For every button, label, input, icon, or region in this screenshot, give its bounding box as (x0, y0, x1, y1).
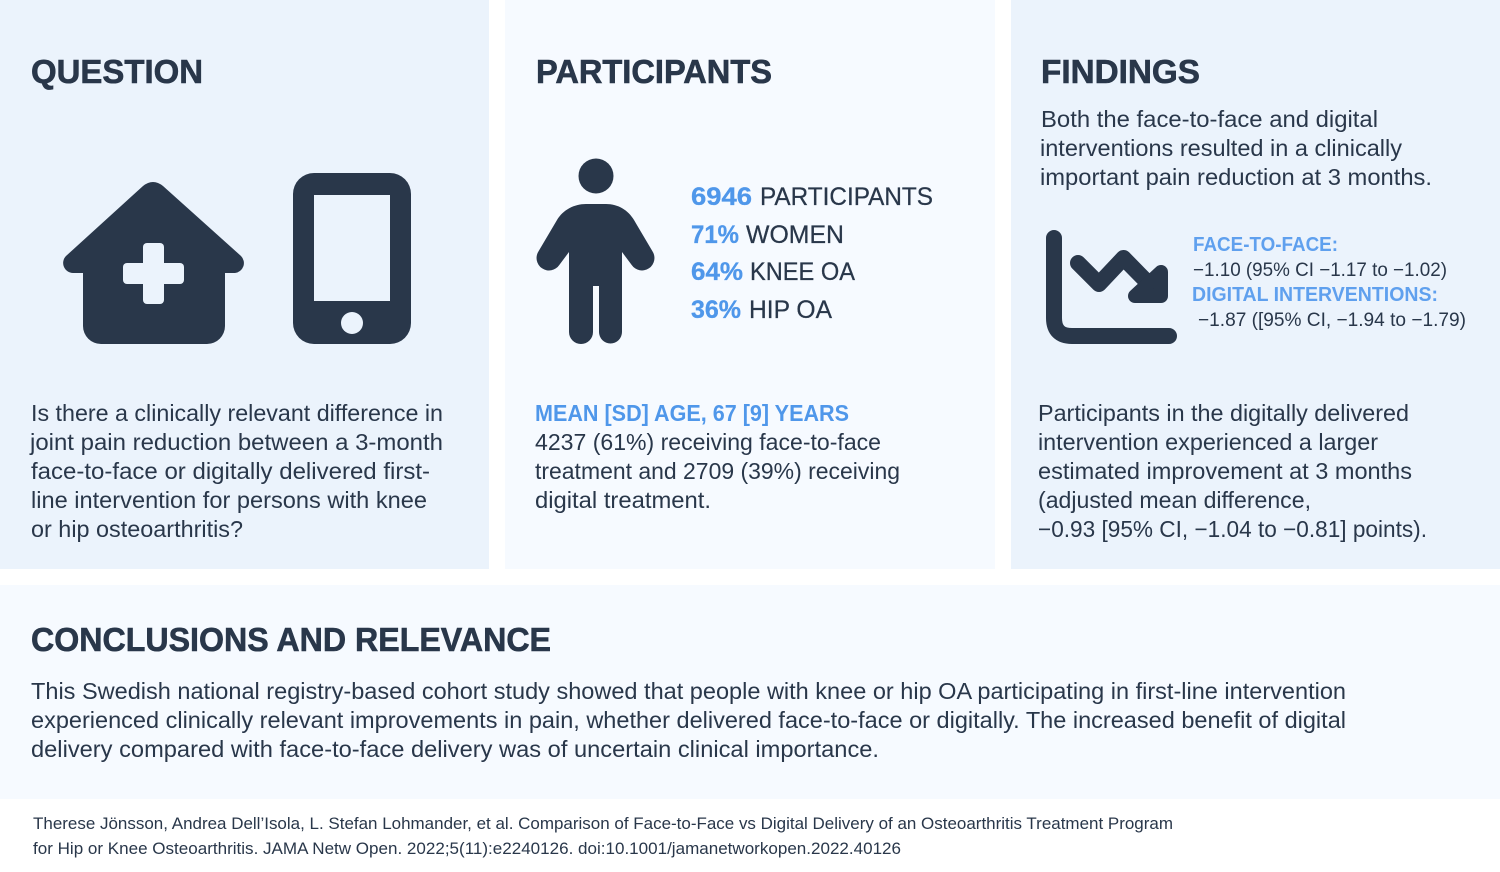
participant statistics: HIP OA (749, 296, 832, 324)
pain reduction results: −1.87 ([95% CI, −1.94 to −1.79) (1198, 310, 1466, 331)
text: adjusted mean difference: −0.93 [95% CI, −1.04 to −0.81] points). (1038, 516, 1427, 542)
text: conclusions (31, 678, 1346, 762)
citation: Therese Jönsson, Andrea Dell’Isola, L. Stefan Lohmander, et al. Comparison of Face-to-Face vs Digital Delivery of an Osteoarthritis Treatment Program (33, 814, 1173, 833)
icon: smartphone (293, 173, 411, 344)
text: conclusions: This Swedish national registry-based cohort study showed that people with knee or hip OA participating in first-line intervention (31, 678, 1346, 704)
text: adjusted mean difference: (adjusted mean difference, (1038, 487, 1311, 513)
text: age and treatment split: digital treatment. (535, 487, 711, 513)
icon: declining chart (1054, 238, 1169, 336)
text: findings summary (1040, 106, 1432, 190)
participant statistics: 64% (691, 258, 743, 286)
panel: question (0, 0, 489, 569)
text: adjusted mean difference: intervention experienced a larger (1038, 429, 1378, 455)
text: age and treatment split: 4237 (61%) receiving face-to-face (535, 429, 881, 455)
pain reduction results (1192, 234, 1466, 331)
icon: house with medical cross (63, 182, 244, 344)
text: age and treatment split (535, 400, 900, 513)
heading: question: QUESTION (31, 53, 203, 90)
citation: for Hip or Knee Osteoarthritis. JAMA Netw Open. 2022;5(11):e2240126. doi:10.1001/jamanetworkopen.2022.40126 (33, 839, 901, 858)
citation (33, 814, 1173, 858)
text: research question: joint pain reduction between a 3-month (29, 429, 443, 455)
text: conclusions: experienced clinically relevant improvements in pain, whether delivered face-to-face or digitally. The increased benefit of digital (31, 707, 1346, 733)
text: adjusted mean difference: Participants in the digitally delivered (1038, 400, 1409, 426)
text: research question: face-to-face or digitally delivered first- (31, 458, 430, 484)
heading: findings: FINDINGS (1041, 53, 1200, 90)
text: research question: or hip osteoarthritis? (31, 516, 243, 542)
text: findings summary: important pain reduction at 3 months. (1040, 164, 1432, 190)
panel: conclusions and relevance (0, 585, 1500, 799)
participant statistics: PARTICIPANTS (760, 183, 933, 211)
text: research question (29, 400, 443, 542)
heading: participants: PARTICIPANTS (536, 53, 772, 90)
panel: findings (1011, 0, 1500, 569)
pain reduction results: FACE-TO-FACE: (1193, 234, 1338, 256)
text: findings summary: interventions resulted in a clinically (1040, 135, 1403, 161)
text: research question: line intervention for persons with knee (31, 487, 427, 513)
icon: person (537, 158, 654, 344)
panel: participants (505, 0, 995, 569)
participant statistics: 6946 (691, 183, 752, 211)
heading: conclusions and relevance: CONCLUSIONS AND RELEVANCE (31, 621, 551, 658)
text: adjusted mean difference (1038, 400, 1427, 542)
pain reduction results: DIGITAL INTERVENTIONS: (1192, 284, 1438, 306)
pain reduction results: −1.10 (95% CI −1.17 to −1.02) (1193, 260, 1447, 281)
text: age and treatment split: treatment and 2709 (39%) receiving (535, 458, 900, 484)
text: age and treatment split: MEAN [SD] AGE, 67 [9] YEARS (535, 400, 849, 426)
participant statistics: WOMEN (746, 221, 844, 249)
text: research question: Is there a clinically relevant difference in (31, 400, 443, 426)
participant statistics: 36% (691, 296, 741, 324)
text: conclusions: delivery compared with face-to-face delivery was of uncertain clinical importance. (31, 736, 879, 762)
participant statistics: 71% (691, 221, 739, 249)
participant statistics: KNEE OA (750, 258, 855, 286)
participant statistics (691, 183, 933, 324)
text: findings summary: Both the face-to-face and digital (1041, 106, 1378, 132)
text: adjusted mean difference: estimated improvement at 3 months (1038, 458, 1412, 484)
